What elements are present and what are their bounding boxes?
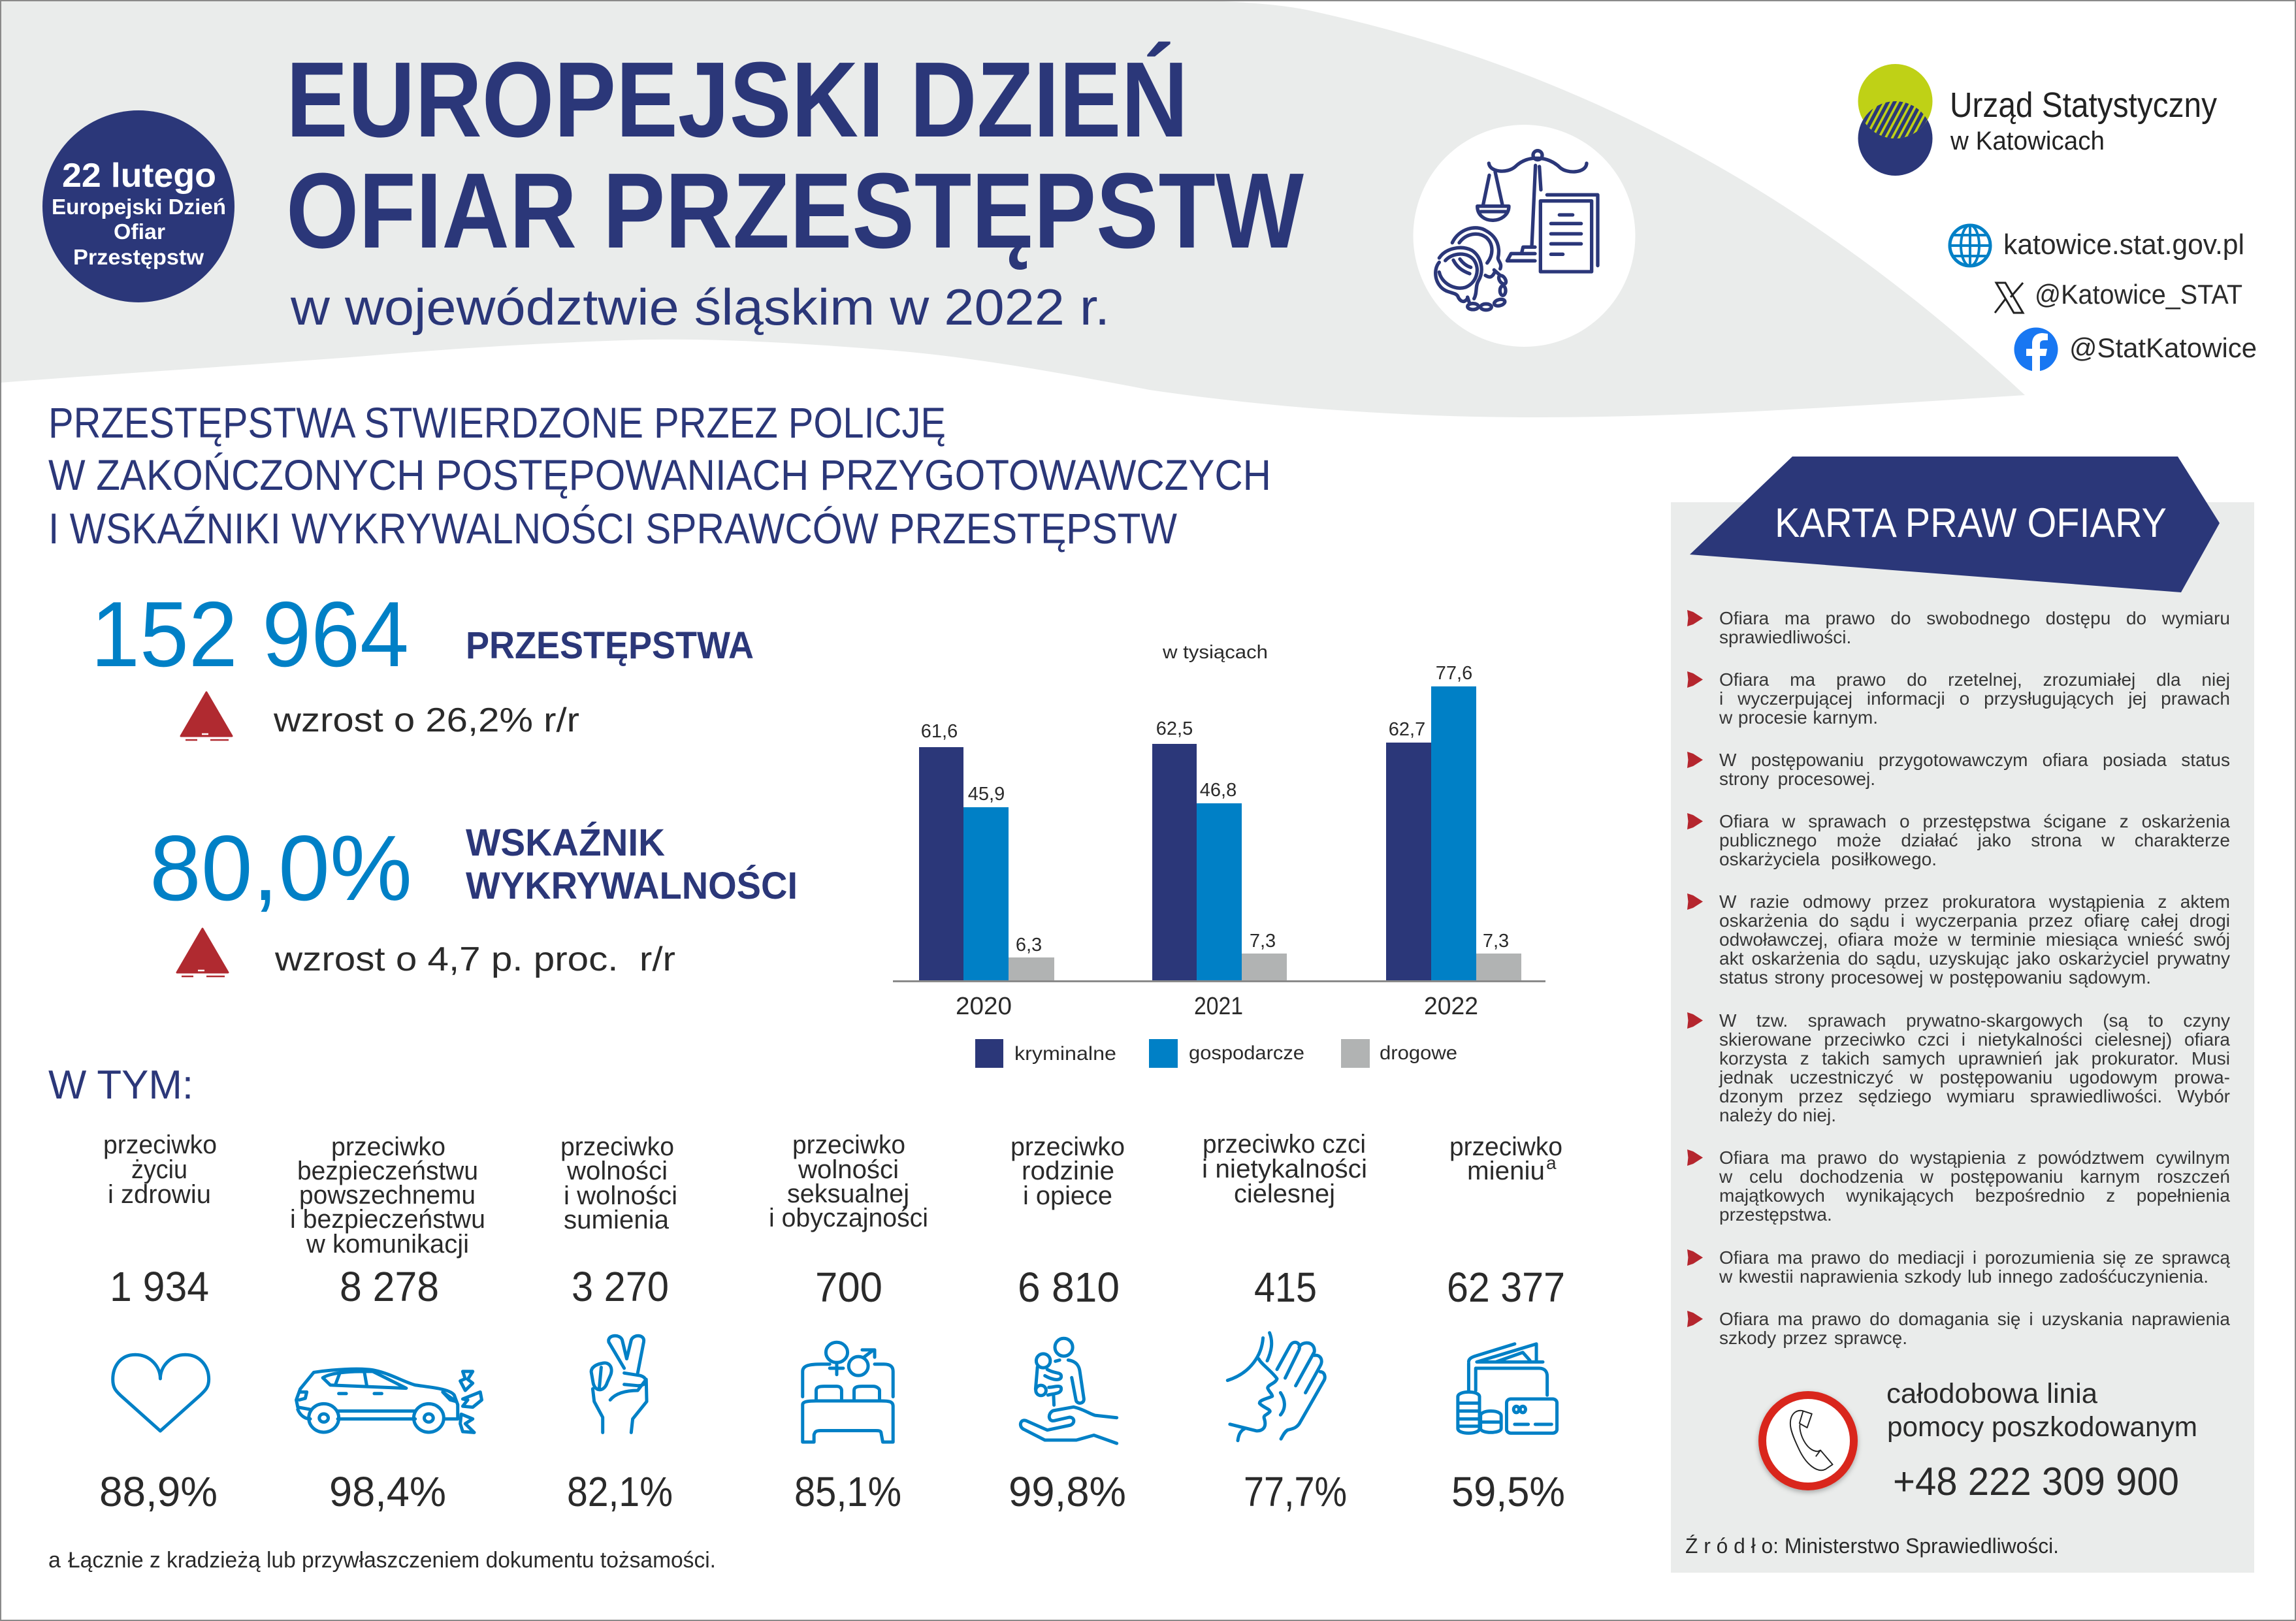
bars 2021	[1152, 744, 1287, 981]
chart unit label: w tysiącach	[1162, 642, 1268, 663]
right 5: private prosecutor: akt oskarżenia do sądu, uzyskując jako oskarżyciel prywatny	[1719, 948, 2230, 969]
white circle behind justice icon	[1414, 125, 1636, 347]
right 5: private prosecutor: oskarżenia do sądu i wyczerpania przez ofiarę całej drogi	[1719, 910, 2230, 931]
logo: Urząd Statystyczny w Katowicach: Urząd Statystyczny	[1950, 86, 2217, 125]
category: family and care: 99,8%	[1009, 1468, 1126, 1515]
header background shape	[0, 0, 2025, 417]
stat: crimes total: 152 964	[91, 583, 409, 686]
right 3: party status: strony procesowej.	[1719, 769, 1875, 789]
value labels: 7,3	[1250, 931, 1276, 952]
right 8: mediation: Ofiara ma prawo do mediacji i porozumienia się ze sprawcą	[1719, 1247, 2230, 1268]
category: life and health	[99, 1131, 218, 1515]
legend: kryminalne	[1014, 1043, 1116, 1065]
panel: victim rights background	[1671, 502, 2254, 1573]
category: sexual freedom and morality: 85,1%	[794, 1468, 901, 1515]
category: sexual freedom and morality: seksualnej	[787, 1180, 909, 1208]
title: EUROPEJSKI DZIEŃ	[286, 40, 1188, 159]
icon: parent and child on a hand	[1020, 1338, 1117, 1443]
category: dignity and bodily integrity: i nietykalności	[1202, 1155, 1367, 1183]
category: freedom and conscience	[560, 1132, 677, 1515]
stat: detection rate: 80,0%	[150, 816, 412, 920]
value labels: 61,6	[921, 721, 958, 742]
category: life and health: życiu	[131, 1155, 187, 1184]
stat: detection rate	[150, 816, 798, 978]
right 9: compensation: Ofiara ma prawo do domagania się i uzyskania naprawienia	[1719, 1309, 2230, 1329]
value labels: 46,8	[1200, 780, 1237, 801]
year labels: 2021	[1194, 993, 1243, 1020]
category: life and health: przeciwko	[103, 1131, 217, 1159]
stat: crimes total	[91, 583, 754, 740]
category: freedom and conscience: sumienia	[564, 1206, 670, 1234]
category: family and care: i opiece	[1023, 1181, 1112, 1210]
banner: KARTA PRAW OFIARY	[1690, 457, 2220, 592]
helpline text: +48 222 309 900	[1893, 1460, 2179, 1503]
icon: bed with gender symbols	[803, 1342, 893, 1442]
category: family and care	[1009, 1132, 1126, 1515]
legend	[975, 1039, 1457, 1068]
date badge	[42, 110, 234, 302]
category: life and health: 88,9%	[99, 1468, 218, 1515]
icon: wallet, coins and card	[1458, 1344, 1557, 1433]
right 4: auxiliary prosecutor: oskarżyciela posiłkowego.	[1719, 849, 1937, 869]
category: freedom and conscience: wolności	[566, 1157, 668, 1185]
right 1: access to justice: sprawiedliwości.	[1719, 627, 1851, 647]
banner: KARTA PRAW OFIARY: KARTA PRAW OFIARY	[1775, 500, 2167, 546]
date badge: 22 lutego	[62, 157, 216, 195]
date badge: Ofiar	[114, 219, 165, 244]
bars 2022	[1386, 686, 1521, 981]
category: sexual freedom and morality: 700	[815, 1264, 882, 1311]
value labels: 62,7	[1389, 719, 1425, 740]
footnote: Łącznie z kradzieżą lub przywłaszczeniem dokumentu tożsamości.	[68, 1548, 716, 1573]
category: property	[1447, 1132, 1565, 1515]
section heading: W ZAKOŃCZONYCH POSTĘPOWANIACH PRZYGOTOWAWCZYCH	[48, 451, 1271, 499]
category: property: a	[1546, 1153, 1557, 1173]
right 4: auxiliary prosecutor	[1687, 811, 2230, 869]
stat: crimes total: PRZESTĘPSTWA	[466, 624, 754, 667]
subtitle: w województwie śląskim w 2022 r.	[290, 278, 1110, 336]
icon: Facebook	[2014, 328, 2058, 372]
stat: crimes total: wzrost o 26,2% r/r	[273, 701, 579, 739]
right 6: private-prosecution cases: dzonym przez sędziego wymiaru sprawiedliwości. Wybór	[1719, 1086, 2230, 1106]
right 3: party status	[1687, 750, 2230, 789]
date badge: Europejski Dzień	[52, 195, 226, 219]
right 1: access to justice: Ofiara ma prawo do swobodnego dostępu do wymiaru	[1719, 608, 2230, 628]
category: freedom and conscience: 82,1%	[567, 1468, 673, 1515]
category: public and traffic safety: 8 278	[340, 1263, 439, 1310]
right 7: civil action: Ofiara ma prawo do wystąpienia z powództwem cywilnym	[1719, 1148, 2230, 1168]
category: public and traffic safety: przeciwko	[331, 1132, 445, 1161]
stat: detection rate: WSKAŹNIK	[466, 822, 665, 864]
category: sexual freedom and morality: i obyczajności	[769, 1204, 928, 1232]
category: life and health: i zdrowiu	[108, 1180, 211, 1209]
right 5: private prosecutor: odwoławczej, ofiara może w terminie miesiąca wnieść swój	[1719, 929, 2230, 950]
stat: detection rate: WYKRYWALNOŚCI	[466, 865, 798, 907]
icon: peace hand	[591, 1336, 647, 1432]
bars 2020	[919, 747, 1054, 981]
category: property: 59,5%	[1451, 1468, 1565, 1515]
right 6: private-prosecution cases: W tzw. sprawach prywatno-skargowych (są to czyny	[1719, 1010, 2230, 1031]
bar chart	[893, 642, 1545, 1068]
category: sexual freedom and morality: przeciwko	[792, 1131, 905, 1159]
right 8: mediation	[1687, 1247, 2230, 1287]
legend: gospodarcze	[1189, 1042, 1304, 1064]
section heading: I WSKAŹNIKI WYKRYWALNOŚCI SPRAWCÓW PRZESTĘPSTW	[48, 504, 1178, 553]
footnote: a	[48, 1548, 61, 1573]
right 6: private-prosecution cases: należy do niej.	[1719, 1105, 1836, 1125]
icon: heart	[113, 1355, 209, 1431]
category: dignity and bodily integrity: 415	[1254, 1264, 1317, 1311]
right 6: private-prosecution cases: skierowane przeciwko czci i nietykalności cielesnej) ofiara	[1719, 1029, 2230, 1050]
value labels	[921, 663, 1509, 955]
right 7: civil action: majątkowych wynikających bezpośrednio z popełnienia	[1719, 1185, 2230, 1206]
value labels: 77,6	[1436, 663, 1472, 684]
icon: hand slapping face	[1227, 1333, 1325, 1441]
icon: X	[1995, 283, 2023, 313]
category: public and traffic safety: i bezpieczeństwu	[290, 1205, 485, 1234]
category: family and care: 6 810	[1018, 1264, 1120, 1311]
category: sexual freedom and morality: wolności	[798, 1155, 899, 1184]
category: dignity and bodily integrity: 77,7%	[1244, 1468, 1347, 1515]
source: Ź r ó d ł o: Ministerstwo Sprawiedliwości.	[1685, 1534, 2059, 1558]
category: freedom and conscience: i wolności	[564, 1181, 677, 1210]
category: freedom and conscience: 3 270	[572, 1263, 669, 1310]
right 6: private-prosecution cases	[1687, 1010, 2230, 1125]
icon: red up triangle	[181, 692, 232, 740]
icon: red up triangle	[177, 929, 228, 976]
helpline text	[1886, 1378, 2197, 1503]
stat: detection rate: wzrost o 4,7 p. proc. r/r	[274, 940, 675, 978]
right 9: compensation	[1687, 1309, 2230, 1348]
category: public and traffic safety	[290, 1132, 485, 1515]
helpline text: pomocy poszkodowanym	[1887, 1411, 2197, 1443]
section heading	[48, 398, 1271, 553]
category: dignity and bodily integrity: cielesnej	[1234, 1180, 1335, 1208]
category: public and traffic safety: 98,4%	[329, 1468, 446, 1515]
year labels: 2022	[1424, 993, 1478, 1020]
section heading: PRZESTĘPSTWA STWIERDZONE PRZEZ POLICJĘ	[48, 398, 946, 447]
category: dignity and bodily integrity	[1202, 1130, 1367, 1515]
category: sexual freedom and morality	[769, 1131, 928, 1515]
icon: globe	[1950, 225, 1990, 266]
category: public and traffic safety: w komunikacji	[306, 1230, 469, 1259]
title: OFIAR PRZESTĘPSTW	[286, 151, 1304, 270]
category: property: przeciwko	[1449, 1132, 1562, 1161]
right 7: civil action: przestępstwa.	[1719, 1204, 1832, 1225]
right 4: auxiliary prosecutor: publicznego może działać jako strona w charakterze	[1719, 830, 2230, 850]
date badge: Przestępstw	[73, 245, 204, 269]
right 4: auxiliary prosecutor: Ofiara w sprawach o przestępstwa ścigane z oskarżenia	[1719, 811, 2230, 831]
category: dignity and bodily integrity: przeciwko czci	[1203, 1130, 1366, 1159]
website link: katowice.stat.gov.pl	[2003, 229, 2244, 261]
right 2: information: i wyczerpującej informacji o przysługujących jej prawach	[1719, 688, 2230, 709]
right 1: access to justice	[1687, 608, 2230, 647]
year labels	[956, 993, 1478, 1020]
value labels: 6,3	[1016, 935, 1042, 955]
right 7: civil action	[1687, 1148, 2230, 1225]
X handle: @Katowice_STAT	[2035, 279, 2242, 310]
right 6: private-prosecution cases: korzysta z takich samych uprawnień jak prokurator. Musi	[1719, 1048, 2230, 1068]
Facebook handle: @StatKatowice	[2069, 332, 2257, 363]
legend: drogowe	[1380, 1042, 1457, 1064]
right 8: mediation: w kwestii naprawienia szkody lub innego zadośćuczynienia.	[1719, 1266, 2208, 1287]
right 2: information: w procesie karnym.	[1719, 707, 1878, 728]
title	[286, 40, 1304, 270]
category: property: mieniu	[1467, 1157, 1545, 1185]
right 5: private prosecutor: status strony procesowej w postępowaniu sądowym.	[1719, 967, 2151, 987]
category: property: 62 377	[1447, 1264, 1565, 1311]
right 2: information	[1687, 669, 2230, 728]
category: freedom and conscience: przeciwko	[560, 1132, 674, 1161]
icon: telephone	[1762, 1395, 1854, 1486]
right 9: compensation: szkody przez sprawcę.	[1719, 1328, 1907, 1348]
heading: W TYM: W TYM:	[48, 1063, 193, 1108]
category: life and health: 1 934	[110, 1263, 209, 1310]
icon: scales, document and handcuffs	[1436, 151, 1598, 310]
value labels: 45,9	[968, 784, 1005, 805]
category: family and care: przeciwko	[1011, 1132, 1125, 1161]
right 5: private prosecutor: W razie odmowy przez prokuratora wystąpienia z aktem	[1719, 891, 2230, 912]
right 7: civil action: w celu dochodzenia w postępowaniu karnym roszczeń	[1719, 1166, 2230, 1187]
category: family and care: rodzinie	[1022, 1157, 1114, 1185]
value labels: 7,3	[1483, 931, 1509, 952]
category: public and traffic safety: powszechnemu	[299, 1181, 476, 1210]
right 6: private-prosecution cases: jednak uczestniczyć w postępowaniu ugodowym prowa-	[1719, 1067, 2230, 1087]
value labels: 62,5	[1156, 718, 1193, 739]
category: public and traffic safety: bezpieczeństwu	[297, 1157, 478, 1185]
logo: Urząd Statystyczny w Katowicach: w Katowicach	[1950, 127, 2105, 155]
helpline text: całodobowa linia	[1886, 1378, 2097, 1409]
logo: Urząd Statystyczny w Katowicach	[1858, 64, 2217, 176]
right 2: information: Ofiara ma prawo do rzetelnej, zrozumiałej dla niej	[1719, 669, 2230, 690]
icon: crashed car	[297, 1369, 481, 1432]
year labels: 2020	[956, 993, 1012, 1020]
right 3: party status: W postępowaniu przygotowawczym ofiara posiada status	[1719, 750, 2230, 770]
right 5: private prosecutor	[1687, 891, 2230, 987]
